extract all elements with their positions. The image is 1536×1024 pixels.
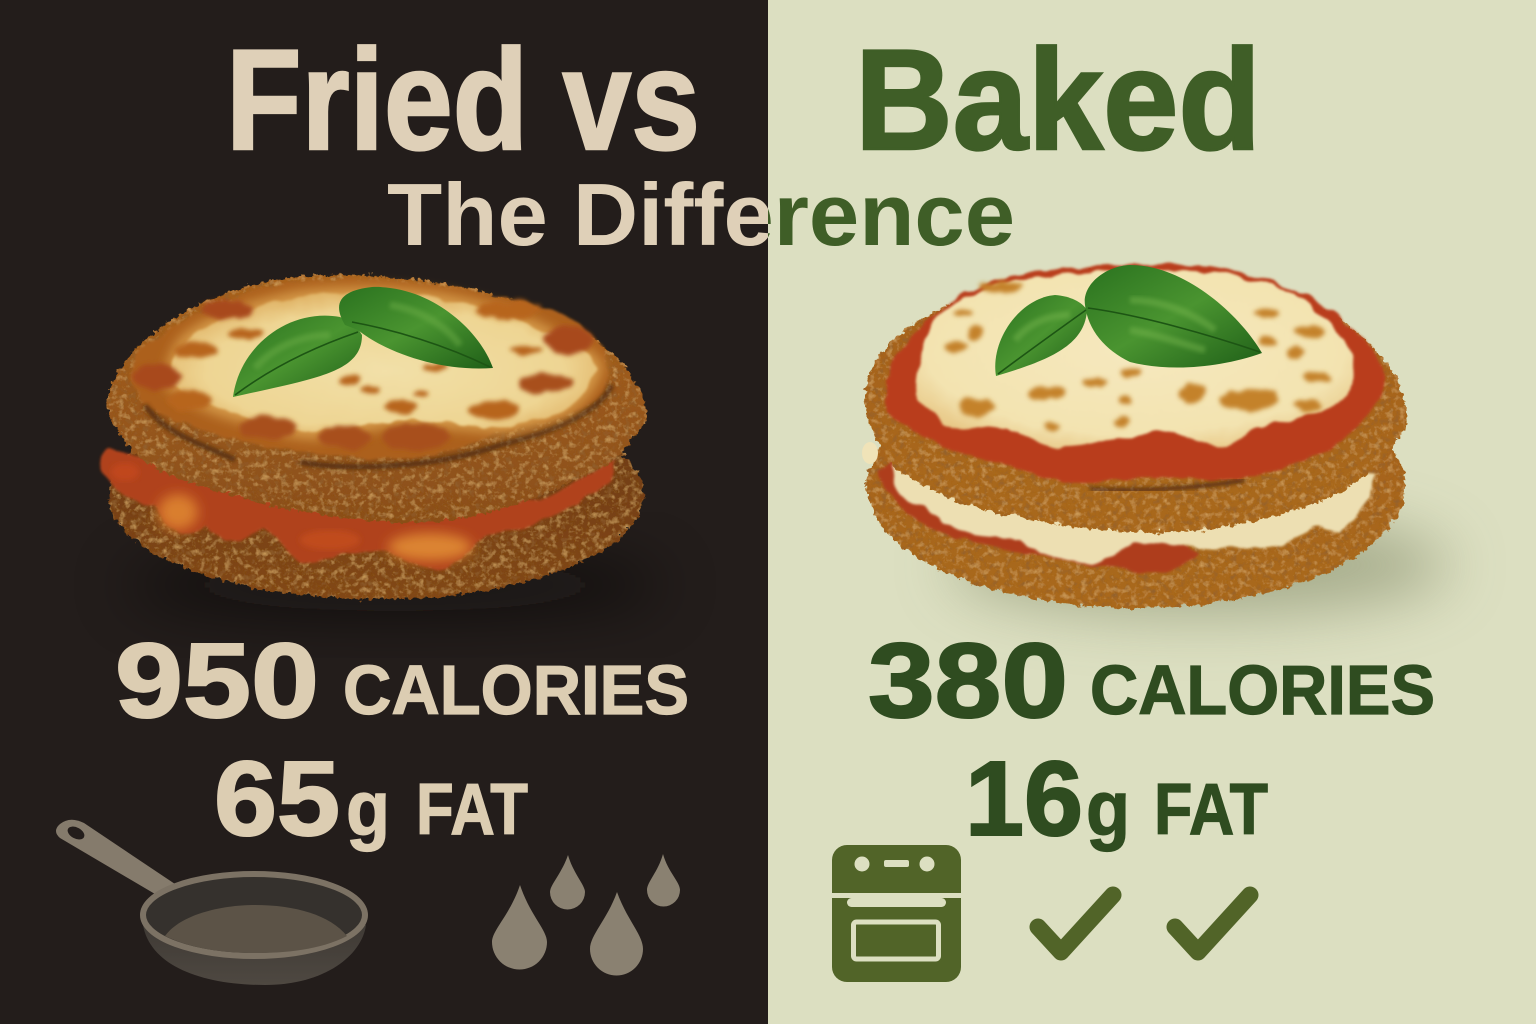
icon: oil drops [492, 854, 680, 976]
basil leaf [233, 287, 493, 397]
bottom patty [867, 364, 1405, 608]
stat: baked fat: FAT [1154, 770, 1268, 850]
icon: check mark [1175, 895, 1250, 952]
stat: fried fat: g [346, 764, 390, 852]
stat: baked fat: g [1086, 764, 1130, 852]
icon: check mark [1038, 895, 1113, 952]
seam shadow [1090, 480, 1245, 490]
top patty [865, 268, 1407, 532]
cheese browning spots [133, 300, 592, 451]
sauce layer [101, 448, 616, 569]
top patty [107, 275, 646, 522]
heading: Fried vs: Fried vs [226, 21, 700, 180]
stat: fried fat: 65 [214, 740, 340, 858]
melted cheese [916, 270, 1354, 447]
stat: fried calories [115, 622, 689, 740]
stat: fried calories: 950 [115, 622, 319, 740]
icon: oven [832, 845, 961, 982]
sauce layer [876, 455, 1200, 571]
melted cheese [171, 293, 597, 433]
food image: fried parmesan [101, 275, 665, 613]
icon: frying pan [56, 820, 366, 985]
food image: baked parmesan [862, 264, 1450, 615]
sauce under cheese [886, 264, 1384, 483]
browned cheese edge [131, 279, 608, 458]
mozzarella layer [893, 462, 1376, 563]
panel: baked background [768, 0, 1536, 1024]
seam shadow [145, 385, 612, 467]
stat: baked calories: CALORIES [1090, 651, 1435, 729]
stat: baked calories: 380 [868, 622, 1068, 740]
sauce highlights [111, 463, 472, 561]
stat: fried fat: FAT [416, 770, 528, 850]
panel: fried background [0, 0, 768, 1024]
cheese glow transition [171, 293, 597, 433]
stat: baked fat: 16 [965, 740, 1083, 858]
heading: Baked: Baked [855, 21, 1261, 180]
cheese blob at patty edge [862, 442, 878, 464]
stat: baked calories [868, 622, 1435, 740]
stat: fried calories: CALORIES [343, 651, 689, 729]
basil leaf [995, 265, 1262, 376]
stat: fried fat [214, 740, 528, 858]
bottom patty [108, 391, 644, 599]
cheese browning spots [945, 282, 1331, 432]
stat: baked fat [965, 740, 1268, 858]
subheading: The Difference: The Difference [387, 165, 1015, 264]
